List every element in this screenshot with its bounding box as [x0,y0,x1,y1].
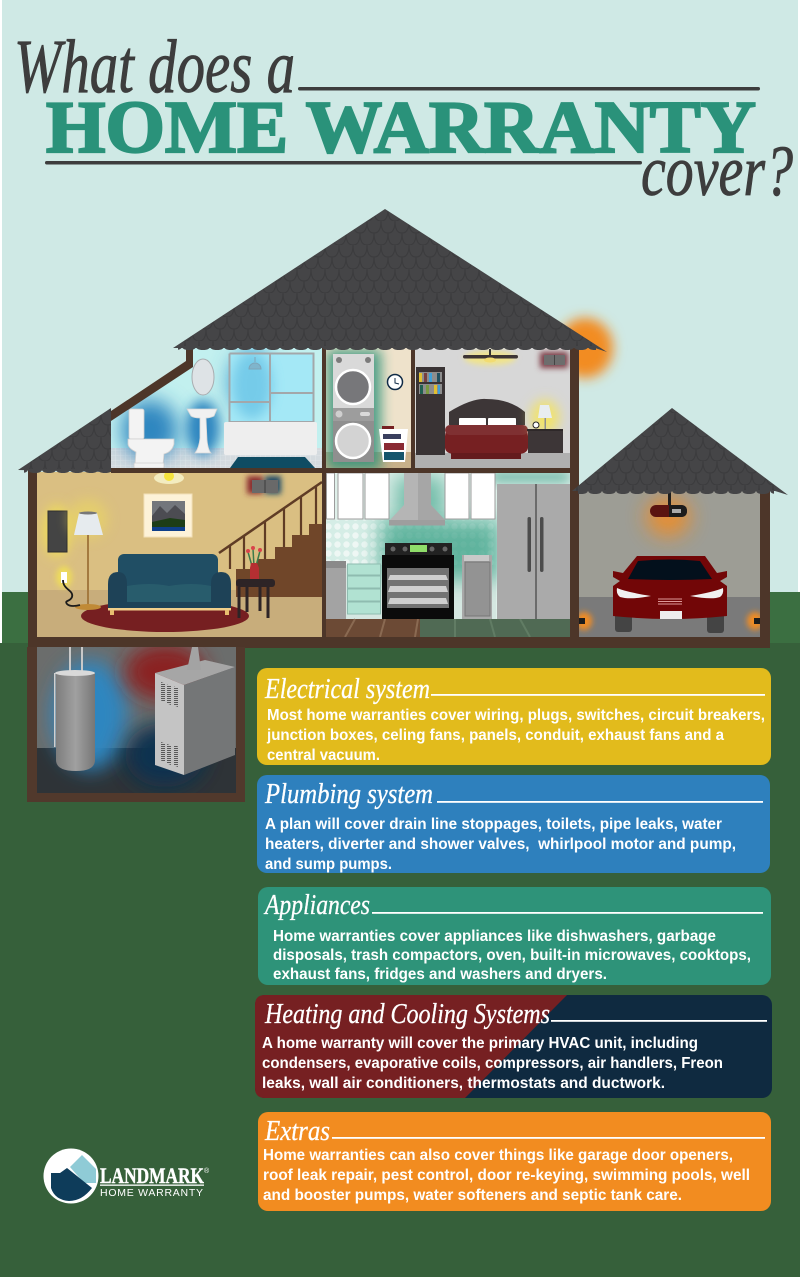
clock [388,374,402,390]
body text: leaks, wall air conditioners, thermostats and ductwork. [262,1075,665,1092]
body text: A plan will cover drain line stoppages, toilets, pipe leaks, water [265,816,722,833]
body text [262,1035,723,1092]
floor lamp [68,499,108,610]
body text [263,1147,750,1204]
room: bedroom [415,348,570,468]
car [613,556,727,633]
body text: and booster pumps, water softeners and septic tank care. [263,1187,682,1204]
heading: Extras: Extras [264,1116,330,1147]
garage door opener [646,490,690,537]
body text: and sump pumps. [265,856,392,873]
trash compactor [462,555,492,619]
nightstand and lamp [527,400,563,453]
room: kitchen [326,472,570,637]
body text: roof leak repair, pest control, door re-keying, swimming pools, well [263,1167,750,1184]
body text: A home warranty will cover the primary HVAC unit, including [262,1035,698,1052]
body text: condensers, evaporative coils, compressors, air handlers, Freon [262,1055,723,1072]
upper cabinets [326,473,495,519]
panel: appliances [258,887,771,985]
body text: heaters, diverter and shower valves, whirlpool motor and pump, [265,836,736,853]
roof: lower left [18,408,111,473]
electrical panel [43,505,71,557]
water heater [54,647,95,771]
wall picture [144,494,192,537]
plumbing glows [122,350,276,460]
room: living room [37,471,322,637]
body text: Most home warranties cover wiring, plugs, switches, circuit breakers, [267,707,765,724]
pedestal sink [187,409,217,453]
body text: disposals, trash compactors, oven, built-in microwaves, cooktops, [273,947,751,964]
panel: electrical system [257,668,771,765]
logo: Landmark Home Warranty: ® [204,1167,210,1175]
sofa [108,554,231,615]
bookcase [416,367,445,455]
logo tagline: HOME WARRANTY [100,1187,203,1199]
range hood [389,473,445,526]
room: laundry [326,348,411,470]
panel: plumbing system [257,775,770,873]
vent [540,352,568,368]
bath rug [230,457,315,468]
basement [27,644,245,802]
body text [273,928,751,983]
mirror [192,359,214,395]
wall vent [247,476,281,494]
side table and vase [236,546,275,618]
garage [576,485,763,637]
heading: Appliances: Appliances [263,890,370,921]
roof: garage [572,408,788,495]
body text: central vacuum. [267,747,380,764]
title line: HOME WARRANTY: HOME WARRANTY [46,87,756,169]
logo wordmark: LANDMARK [100,1163,204,1188]
body text: Home warranties cover appliances like dishwashers, garbage [273,928,716,945]
logo: Landmark Home Warranty [44,1148,210,1204]
refrigerator [497,484,570,619]
laundry basket [379,426,408,462]
panel: extras [258,1112,771,1211]
body text: Home warranties can also cover things like garage door openers, [263,1147,733,1164]
heading: Heating and Cooling Systems: Heating and Cooling Systems [264,999,550,1030]
house: main structure [18,209,788,1211]
garage door sensors [576,612,763,630]
title line: What does a: What does a [14,25,295,109]
rug [81,600,249,632]
heading: Plumbing system: Plumbing system [264,779,433,810]
basement glows [52,644,205,787]
bed [445,399,528,459]
toilet [128,409,174,468]
dishwasher [326,561,346,619]
room: bathroom [111,348,322,468]
ceiling fan [463,349,518,365]
ceiling light [154,471,184,484]
drawers [348,564,380,614]
body text: junction boxes, celing fans, panels, conduit, exhaust fans and a [266,727,724,744]
body text [266,707,765,764]
furnace [155,647,235,775]
roof: main [173,209,607,352]
shower window [229,351,314,422]
stove [382,543,454,619]
title [14,25,793,211]
logo icon [44,1148,98,1204]
body text [265,816,736,873]
stairs [219,482,322,597]
wood floor [326,619,570,637]
body text: exhaust fans, fridges and washers and dryers. [273,966,607,983]
panel: heating and cooling systems [255,995,772,1098]
house framing walls [28,345,770,648]
wall outlet and cord [56,566,80,606]
stacked dryer and washer [333,354,374,462]
heading: Electrical system: Electrical system [264,674,430,705]
bathtub [224,422,317,455]
glow: roof leak orange [557,318,613,378]
